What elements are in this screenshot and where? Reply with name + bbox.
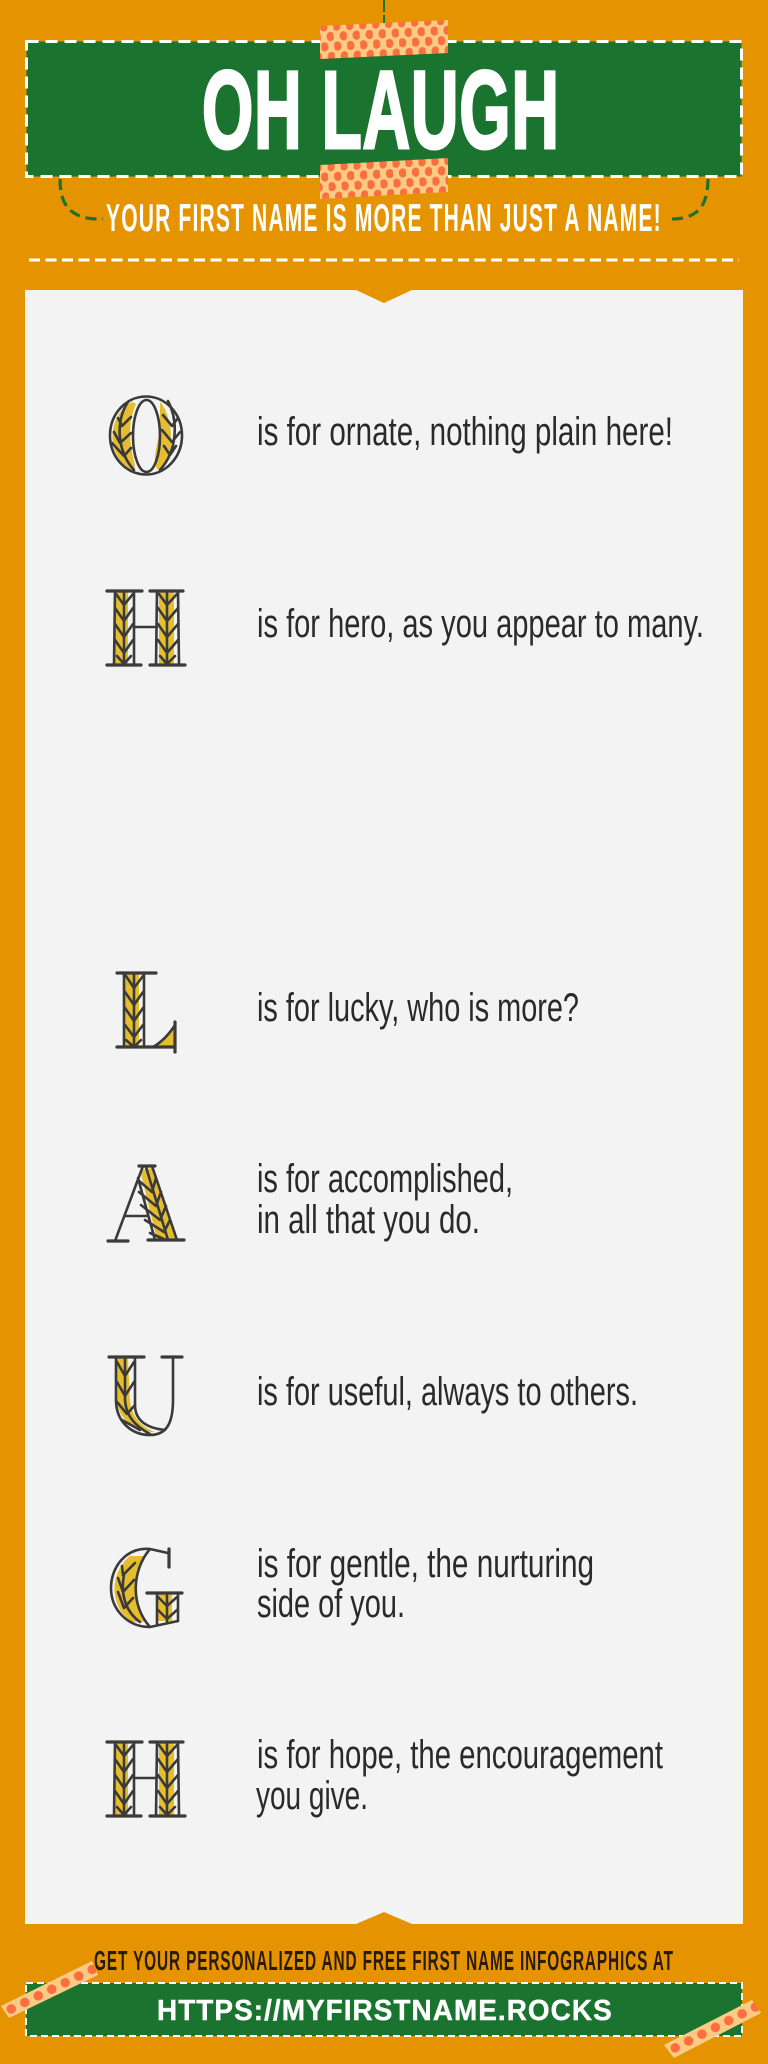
letter A: [108, 1166, 184, 1241]
text: A lines: [257, 1157, 513, 1242]
subtitle connector right: [669, 179, 708, 219]
letter O: [110, 396, 182, 474]
url: HTTPS://MYFIRSTNAME.ROCKS: [157, 1994, 612, 2026]
subtitle: YOUR FIRST NAME IS MORE THAN JUST A NAME!: [106, 196, 661, 240]
text: second H lines: [256, 1733, 663, 1818]
letter G: [111, 1549, 182, 1627]
panel background: [25, 290, 743, 1924]
panel: letters: [25, 290, 743, 1924]
text: second H lines: you give.: [256, 1774, 368, 1818]
hanging string: [383, 0, 385, 24]
text: A lines: is for accomplished,: [257, 1157, 513, 1201]
left tape: [1, 1961, 98, 2018]
green title box: [26, 42, 742, 176]
text: A lines: in all that you do.: [257, 1198, 480, 1242]
footer call to action: GET YOUR PERSONALIZED AND FREE FIRST NAME INFOGRAPHICS AT: [94, 1945, 673, 1976]
bottom tape: [320, 158, 448, 199]
letter L: [117, 973, 175, 1052]
text: G lines: [257, 1542, 594, 1626]
text: G lines: is for gentle, the nurturing: [257, 1542, 594, 1586]
green url box: [26, 1983, 742, 2036]
letter H: [107, 591, 185, 665]
text: G lines: side of you.: [257, 1582, 405, 1626]
top tape: [320, 20, 448, 59]
right tape: [664, 2000, 761, 2058]
header banner: [26, 0, 742, 199]
dashed divider: [29, 258, 739, 262]
footer banner: [1, 1961, 761, 2058]
title: OH LAUGH: [202, 50, 559, 172]
letter U: [109, 1357, 182, 1435]
subtitle connector left: [60, 179, 103, 219]
text: L line: is for lucky, who is more?: [257, 986, 579, 1030]
letter H second: [107, 1742, 185, 1816]
